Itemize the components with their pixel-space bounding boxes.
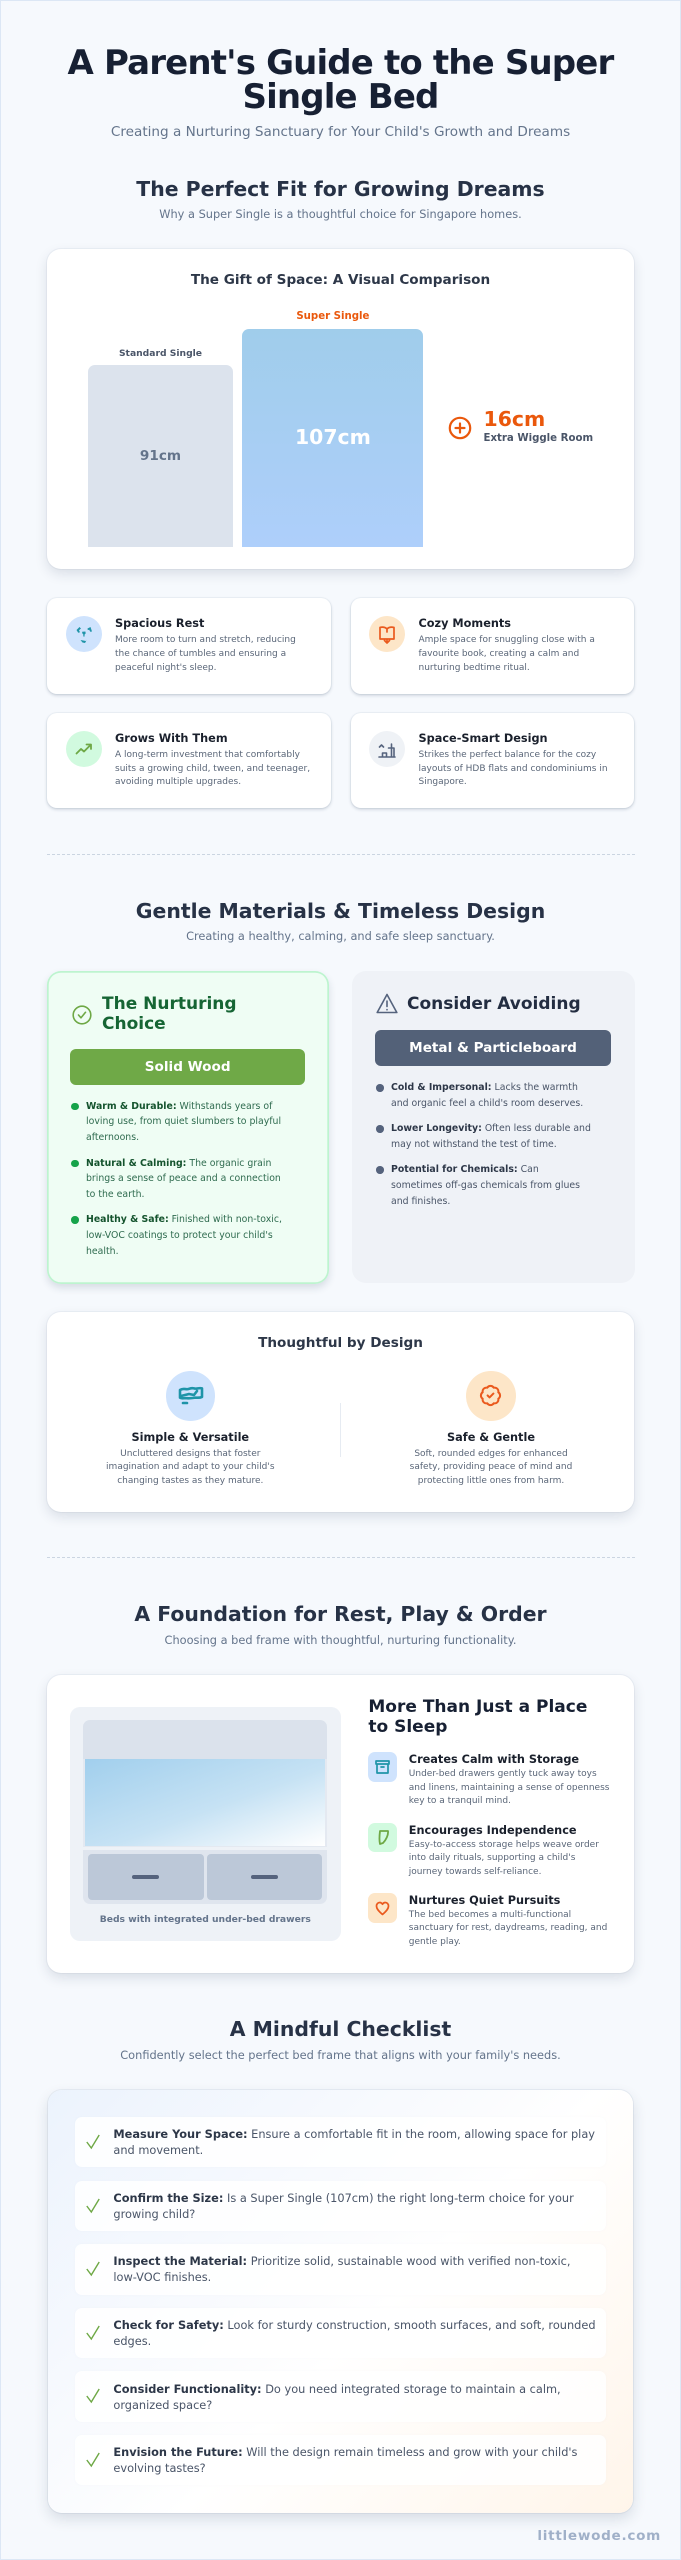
section heading: foundation xyxy=(134,1602,547,1647)
icon: small building xyxy=(369,731,405,767)
heading: Cozy Moments xyxy=(418,617,511,630)
description xyxy=(409,1769,609,1806)
item text: and movement. xyxy=(113,2143,203,2157)
title: A Parent's Guide to the Super xyxy=(68,43,613,83)
icon: book xyxy=(369,616,405,652)
drawback: cold and impersonal xyxy=(376,1082,583,1109)
section heading: perfect fit xyxy=(136,177,545,221)
description: Soft, rounded edges for enhanced xyxy=(414,1449,568,1459)
icon: simple design xyxy=(166,1371,215,1420)
section heading: perfect fit: The Perfect Fit for Growing Dreams xyxy=(136,177,545,201)
description xyxy=(106,1449,275,1486)
benefit: natural and calming xyxy=(71,1158,281,1200)
panel: spacious rest xyxy=(47,598,331,694)
drawback: lower longevity: may not withstand the test of time. xyxy=(391,1139,557,1150)
material badge: solid wood: Solid Wood xyxy=(145,1059,231,1075)
callout: extra width value: 16cm xyxy=(484,407,545,431)
benefit: natural and calming: to the earth. xyxy=(86,1189,145,1200)
column: safe and gentle xyxy=(410,1371,572,1486)
checklist item: size xyxy=(75,2181,606,2231)
drawback: cold and impersonal: and organic feel a child's room deserves. xyxy=(391,1098,583,1109)
icon: check circle xyxy=(72,1005,92,1025)
drawback: cold and impersonal: Cold & Impersonal: Lacks the warmth xyxy=(391,1082,578,1093)
icon: badge check xyxy=(466,1371,516,1420)
heading: Spacious Rest xyxy=(115,617,204,630)
description: A long-term investment that comfortably xyxy=(115,750,300,760)
description: key to a tranquil mind. xyxy=(409,1796,511,1806)
checklist item: safety xyxy=(75,2308,606,2358)
description xyxy=(410,1449,572,1486)
description: journey towards self-reliance. xyxy=(409,1867,541,1877)
mattress frame xyxy=(83,1759,327,1847)
description: the chance of tumbles and ensuring a xyxy=(115,649,286,659)
section heading: checklist: Confidently select the perfect bed frame that aligns with your family's needs. xyxy=(120,2048,561,2062)
bar: standard single 91cm: 91cm xyxy=(140,448,181,464)
description xyxy=(418,635,595,673)
feature: encourages independence xyxy=(368,1823,599,1877)
item text: Consider Functionality: Do you need integrated storage to maintain a calm, xyxy=(113,2382,561,2396)
heading: Consider Avoiding xyxy=(407,994,581,1014)
section heading: materials xyxy=(136,899,545,943)
right drawer xyxy=(207,1854,322,1900)
illustration caption: Beds with integrated under-bed drawers xyxy=(100,1914,311,1925)
section heading: materials: Creating a healthy, calming, and safe sleep sanctuary. xyxy=(186,929,495,943)
description xyxy=(408,1840,599,1877)
item text xyxy=(113,2254,571,2284)
benefit: warm and durable: afternoons. xyxy=(86,1132,139,1143)
checklist item: future xyxy=(75,2435,606,2485)
panel: more than a place to sleep xyxy=(47,1675,634,1973)
bed illustration xyxy=(83,1720,327,1904)
checklist item: functionality xyxy=(75,2371,606,2422)
drawback: potential for chemicals: sometimes off-gas chemicals from glues xyxy=(391,1180,580,1191)
column divider xyxy=(340,1403,341,1457)
drawback: lower longevity: Lower Longevity: Often less durable and xyxy=(391,1123,591,1134)
description: More room to turn and stretch, reducing xyxy=(115,635,296,645)
heading: Grows With Them xyxy=(115,732,228,745)
icon: trend up xyxy=(66,731,102,767)
column: simple and versatile xyxy=(106,1371,275,1486)
panel: checklist xyxy=(48,2090,633,2513)
title: Single Bed xyxy=(242,77,439,117)
description: peaceful night's sleep. xyxy=(115,663,216,673)
label: standard single: Standard Single xyxy=(119,348,202,359)
item text: low-VOC finishes. xyxy=(113,2270,211,2284)
description: avoiding multiple upgrades. xyxy=(115,777,241,787)
description: and linens, maintaining a sense of openness xyxy=(409,1783,609,1793)
bar: super single 107cm: 107cm xyxy=(295,424,371,448)
icon: plus circle xyxy=(448,416,472,440)
bar: super single 107cm xyxy=(242,328,423,546)
callout: extra width label: Extra Wiggle Room xyxy=(484,433,593,444)
headboard xyxy=(83,1720,327,1759)
drawback: potential for chemicals xyxy=(376,1164,580,1207)
heading: The Nurturing xyxy=(102,994,237,1014)
item text: growing child? xyxy=(113,2207,195,2221)
description: favourite book, creating a calm and xyxy=(418,649,579,659)
panel: the nurturing choice xyxy=(47,971,329,1284)
panel: grows with them xyxy=(47,713,331,808)
benefit: natural and calming: brings a sense of peace and a connection xyxy=(86,1173,281,1184)
footer brand: littlewode.com xyxy=(537,2528,661,2544)
panel: visual comparison xyxy=(47,249,634,569)
heading: Encourages Independence xyxy=(409,1824,577,1837)
material badge: metal and particleboard: Metal & Particleboard xyxy=(409,1040,577,1056)
description: Under-bed drawers gently tuck away toys xyxy=(409,1769,597,1779)
benefit: healthy and safe: Healthy & Safe: Finished with non-toxic, xyxy=(86,1214,282,1225)
benefit: warm and durable: loving use, from quiet slumbers to playful xyxy=(86,1116,281,1127)
feature: creates calm xyxy=(368,1752,609,1806)
bar: standard single 91cm xyxy=(88,365,233,546)
icon: check xyxy=(86,2326,100,2340)
heading xyxy=(368,1697,587,1737)
item text: evolving tastes? xyxy=(113,2461,206,2475)
description: Uncluttered designs that foster xyxy=(120,1449,260,1459)
description: protecting little ones from harm. xyxy=(418,1476,564,1486)
icon: check xyxy=(86,2262,100,2276)
section heading: perfect fit: Why a Super Single is a thoughtful choice for Singapore homes. xyxy=(159,207,522,221)
description: layouts of HDB flats and condominiums in xyxy=(418,764,608,774)
icon: check xyxy=(86,2452,100,2467)
heading: Simple & Versatile xyxy=(131,1431,249,1444)
item text xyxy=(113,2444,577,2476)
heading: Space-Smart Design xyxy=(418,732,548,745)
benefit: healthy and safe: health. xyxy=(86,1246,119,1257)
icon: heart xyxy=(368,1893,397,1922)
item text: Inspect the Material: Prioritize solid, sustainable wood with verified non-toxic, xyxy=(113,2254,571,2268)
heading: More Than Just a Place xyxy=(368,1697,587,1717)
drawback: lower longevity xyxy=(376,1123,591,1150)
illustration panel: bed with drawers xyxy=(70,1707,341,1941)
panel: thoughtful by design xyxy=(47,1312,634,1512)
comparison heading: The Gift of Space: A Visual Comparison xyxy=(191,272,490,288)
icon: warning triangle xyxy=(376,994,398,1014)
material badge: solid wood xyxy=(70,1049,305,1085)
description xyxy=(408,1910,607,1947)
description: Easy-to-access storage helps weave order xyxy=(409,1840,599,1850)
drawback: potential for chemicals: Potential for Chemicals: Can xyxy=(391,1164,539,1175)
item text: edges. xyxy=(113,2334,151,2348)
icon: spacious rest xyxy=(66,616,102,652)
panel: consider avoiding xyxy=(352,971,635,1283)
description: Ample space for snuggling close with a xyxy=(418,635,595,645)
subtitle: Creating a Nurturing Sanctuary for Your Child's Growth and Dreams xyxy=(111,124,570,140)
item text: organized space? xyxy=(113,2398,212,2412)
heading: to Sleep xyxy=(368,1717,447,1737)
section heading: foundation: A Foundation for Rest, Play & Order xyxy=(134,1602,547,1626)
drawer base xyxy=(83,1850,327,1904)
benefit: healthy and safe: low-VOC coatings to protect your child's xyxy=(86,1230,273,1241)
material badge: metal and particleboard xyxy=(375,1030,611,1066)
description xyxy=(115,635,296,673)
item text: Confirm the Size: Is a Super Single (107cm) the right long-term choice for your xyxy=(113,2191,574,2205)
mattress xyxy=(85,1759,325,1846)
benefit: healthy and safe xyxy=(71,1214,282,1257)
description: The bed becomes a multi-functional xyxy=(409,1910,571,1920)
benefit: warm and durable: Warm & Durable: Withstands years of xyxy=(86,1100,272,1112)
description: safety, providing peace of mind and xyxy=(410,1462,572,1472)
description xyxy=(418,750,608,787)
checklist item: material xyxy=(75,2244,606,2295)
left drawer xyxy=(88,1854,204,1900)
checklist item: measure xyxy=(75,2117,606,2167)
description: nurturing bedtime ritual. xyxy=(418,663,530,673)
icon: check xyxy=(86,2388,100,2404)
icon: archive box xyxy=(368,1752,397,1782)
description: Singapore. xyxy=(418,777,467,787)
description: suits a growing child, tween, and teenager, xyxy=(115,764,310,774)
panel: cozy moments xyxy=(350,598,634,694)
description: into daily rituals, supporting a child's xyxy=(409,1853,575,1863)
description: sanctuary for rest, daydreams, reading, and xyxy=(409,1923,607,1933)
description: changing tastes as they mature. xyxy=(117,1476,263,1486)
item text: Envision the Future: Will the design remain timeless and grow with your child's xyxy=(113,2445,577,2459)
benefit: natural and calming: Natural & Calming: The organic grain xyxy=(86,1158,271,1168)
item text xyxy=(113,2127,595,2157)
heading: Nurtures Quiet Pursuits xyxy=(409,1894,560,1907)
panel: space-smart design xyxy=(350,713,634,808)
description: imagination and adapt to your child's xyxy=(106,1462,275,1472)
title xyxy=(68,43,614,117)
item text xyxy=(113,2381,561,2413)
section heading: foundation: Choosing a bed frame with thoughtful, nurturing functionality. xyxy=(165,1633,516,1647)
heading: Creates Calm with Storage xyxy=(409,1753,579,1766)
drawer handle xyxy=(132,1875,159,1879)
item text: Measure Your Space: Ensure a comfortable fit in the room, allowing space for play xyxy=(113,2127,595,2141)
heading: Choice xyxy=(102,1014,166,1034)
icon: check xyxy=(86,2134,100,2150)
drawback: potential for chemicals: and finishes. xyxy=(391,1196,450,1207)
heading: Thoughtful by Design xyxy=(258,1335,423,1351)
label: super single: Super Single xyxy=(296,311,369,322)
section heading: checklist: A Mindful Checklist xyxy=(230,2017,451,2041)
item text xyxy=(113,2191,574,2221)
icon: leaf xyxy=(368,1823,397,1852)
description xyxy=(115,750,310,787)
item text: Check for Safety: Look for sturdy construction, smooth surfaces, and soft, rounded xyxy=(113,2318,596,2332)
description: gentle play. xyxy=(409,1937,461,1947)
heading: Safe & Gentle xyxy=(447,1431,535,1444)
item text xyxy=(113,2318,596,2348)
section heading: checklist xyxy=(120,2017,561,2062)
section heading: materials: Gentle Materials & Timeless Design xyxy=(136,899,545,923)
description: Strikes the perfect balance for the cozy xyxy=(418,750,596,760)
heading xyxy=(102,994,237,1034)
benefit: warm and durable xyxy=(71,1100,281,1143)
drawer handle xyxy=(251,1875,278,1879)
feature: nurtures quiet pursuits xyxy=(368,1893,607,1947)
icon: check xyxy=(86,2198,100,2214)
